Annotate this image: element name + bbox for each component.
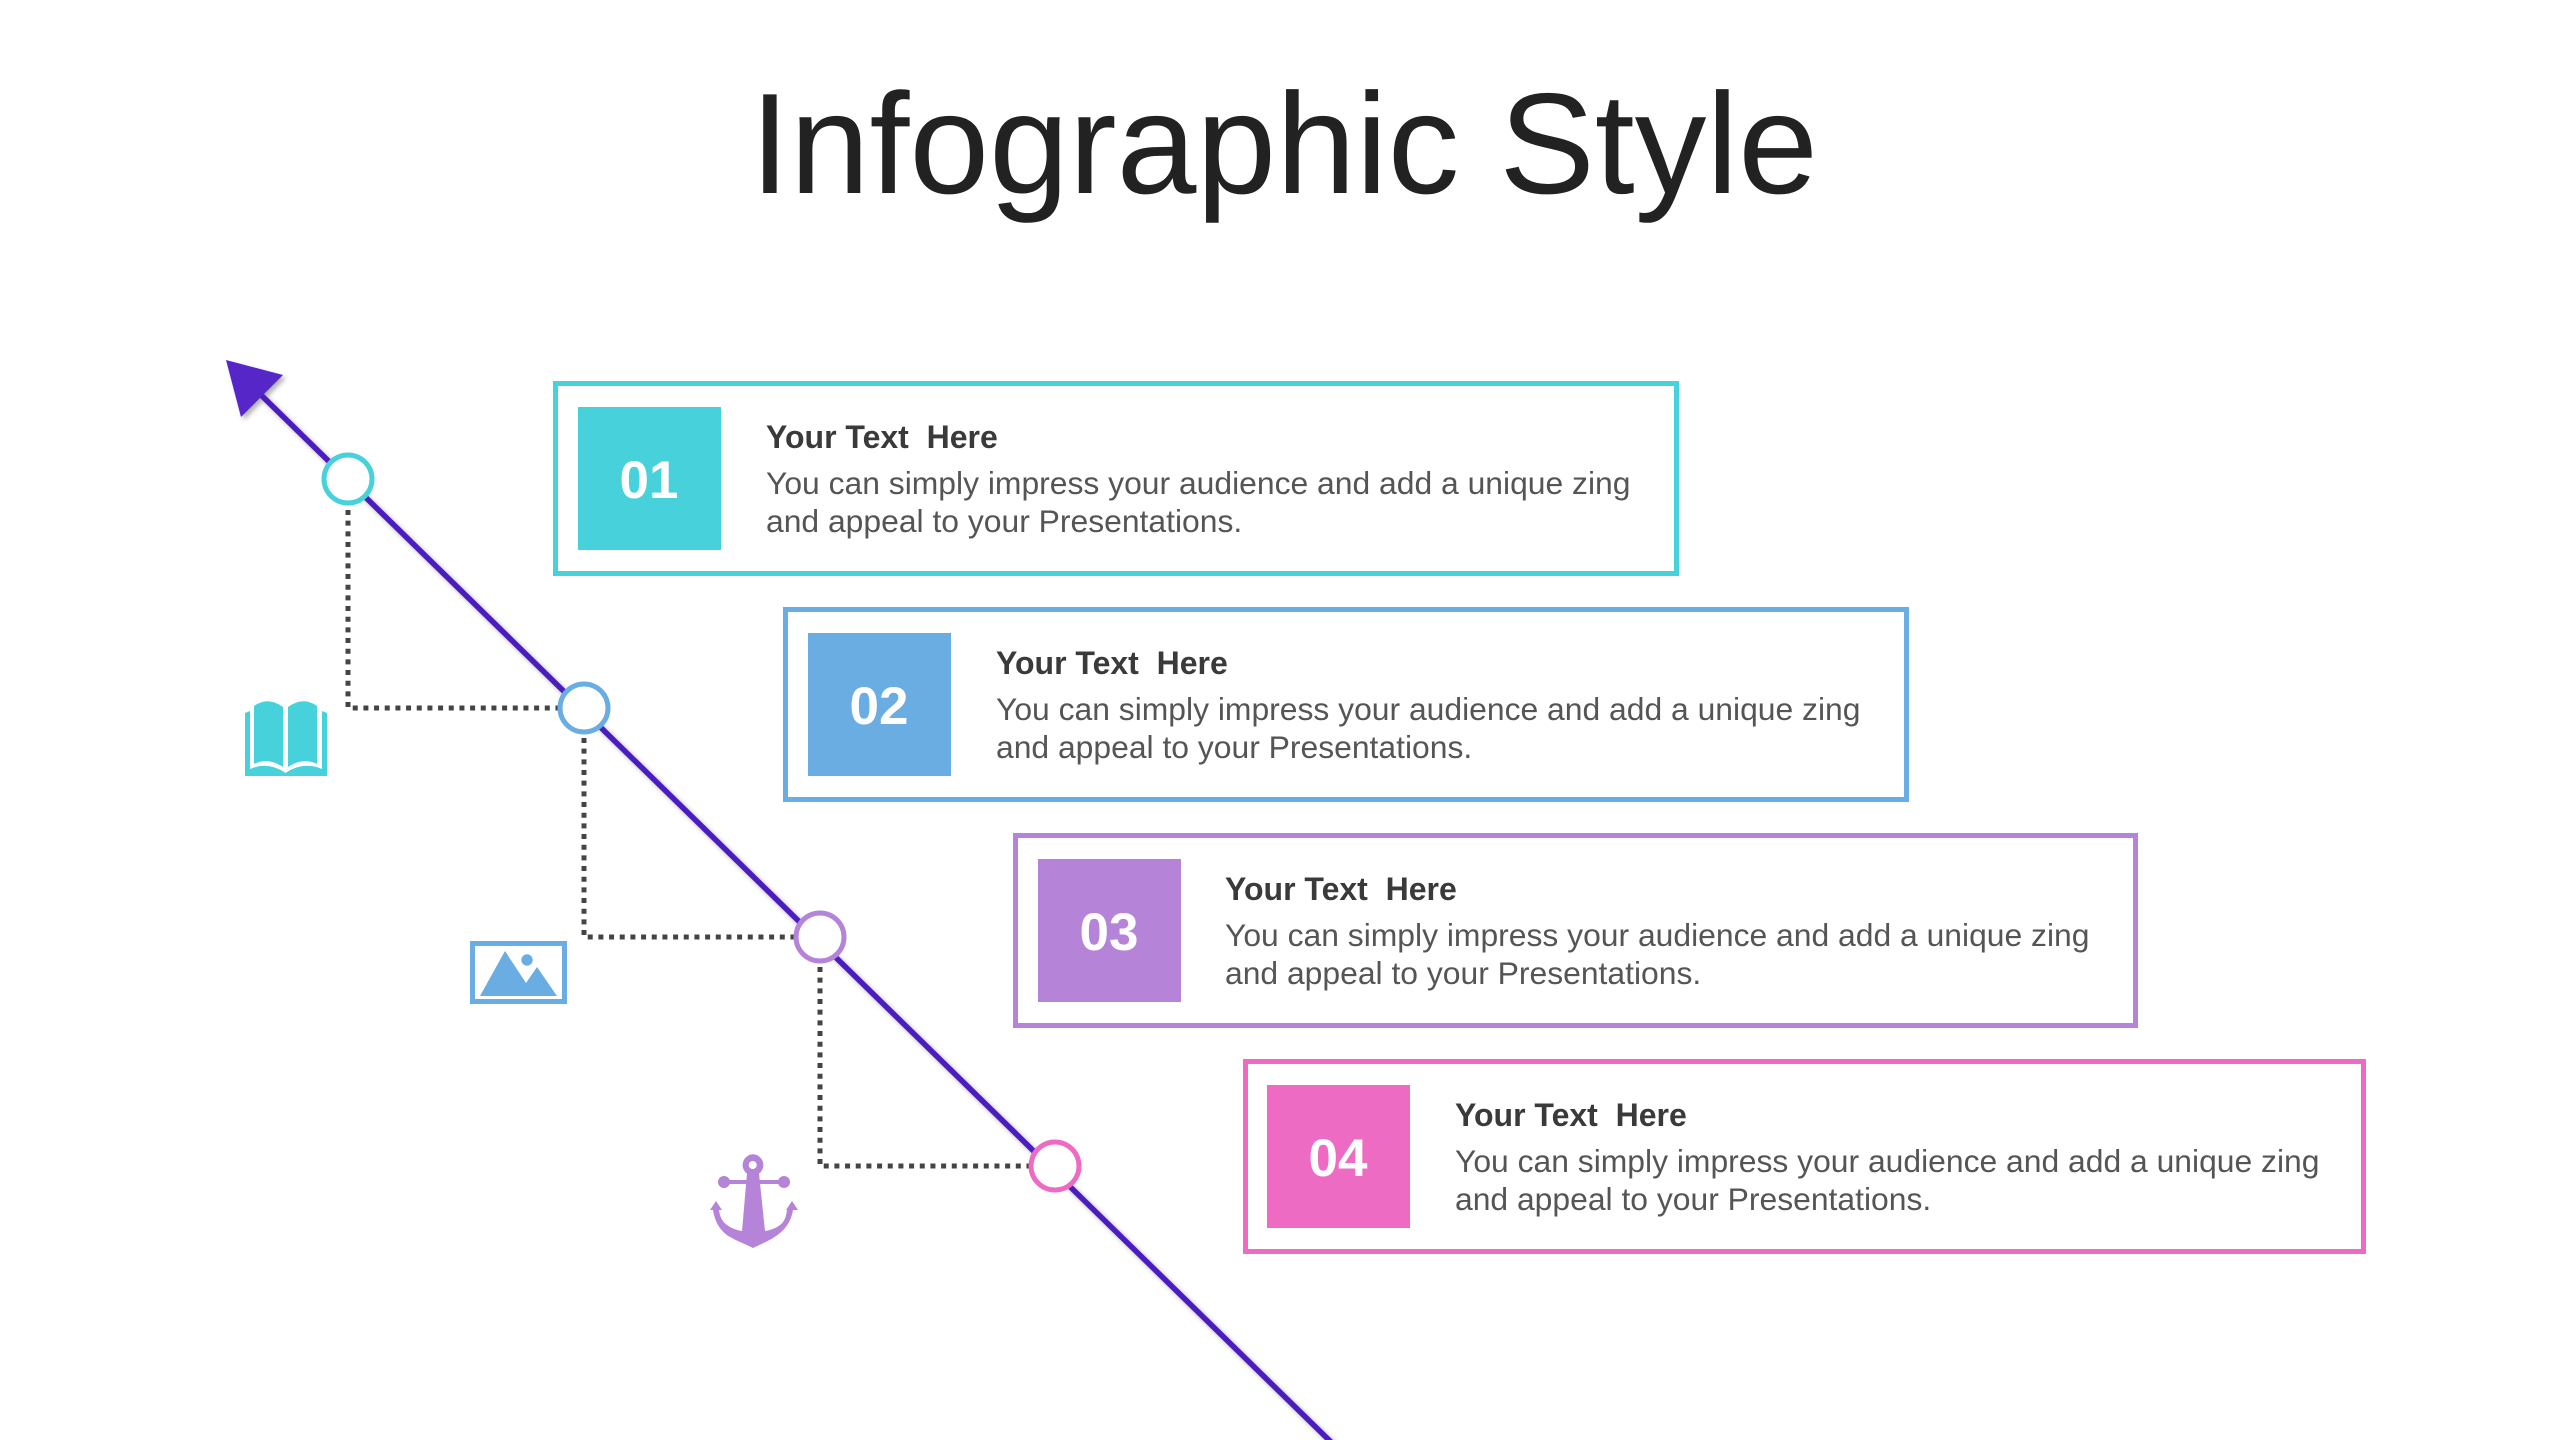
- panel: step 04: [1246, 1062, 2364, 1252]
- body text 04: You can simply impress your audience and add a unique zing: [1455, 1143, 2319, 1179]
- panel: step 01: [556, 384, 1676, 574]
- body text 03: [1225, 917, 2089, 991]
- body text 01: [766, 465, 1630, 539]
- number badge 02: 02: [850, 677, 908, 736]
- heading 03: Your Text Here: [1225, 871, 1457, 907]
- body text 04: [1455, 1143, 2319, 1217]
- icon: open book: [245, 701, 327, 776]
- timeline node 4: [1031, 1142, 1079, 1190]
- number badge 04: [1267, 1085, 1410, 1228]
- timeline node 1: [324, 455, 372, 503]
- number badge 04: 04: [1309, 1129, 1368, 1188]
- timeline node 2: [560, 684, 608, 732]
- dotted connector 3: [820, 967, 1030, 1166]
- panel: step 03: [1016, 836, 2136, 1026]
- number badge 03: 03: [1080, 903, 1138, 962]
- number badge 01: [578, 407, 721, 550]
- icon: picture: [472, 944, 564, 1002]
- body text 04: and appeal to your Presentations.: [1455, 1181, 1931, 1217]
- body text 03: and appeal to your Presentations.: [1225, 955, 1701, 991]
- body text 02: [996, 691, 1860, 765]
- timeline arrow: [226, 360, 1333, 1440]
- dotted connector 2: [584, 738, 795, 937]
- heading 02: Your Text Here: [996, 645, 1228, 681]
- dotted connector 1: [348, 510, 560, 708]
- title: Infographic Style: [750, 64, 1818, 224]
- body text 02: and appeal to your Presentations.: [996, 729, 1472, 765]
- number badge 02: [808, 633, 951, 776]
- body text 01: You can simply impress your audience and add a unique zing: [766, 465, 1630, 501]
- number badge 01: 01: [620, 451, 678, 510]
- body text 01: and appeal to your Presentations.: [766, 503, 1242, 539]
- number badge 03: [1038, 859, 1181, 1002]
- body text 02: You can simply impress your audience and add a unique zing: [996, 691, 1860, 727]
- heading 04: Your Text Here: [1455, 1097, 1687, 1133]
- icon: anchor: [710, 1154, 798, 1248]
- panel: step 02: [786, 610, 1906, 800]
- timeline node 3: [796, 913, 844, 961]
- body text 03: You can simply impress your audience and add a unique zing: [1225, 917, 2089, 953]
- heading 01: Your Text Here: [766, 419, 998, 455]
